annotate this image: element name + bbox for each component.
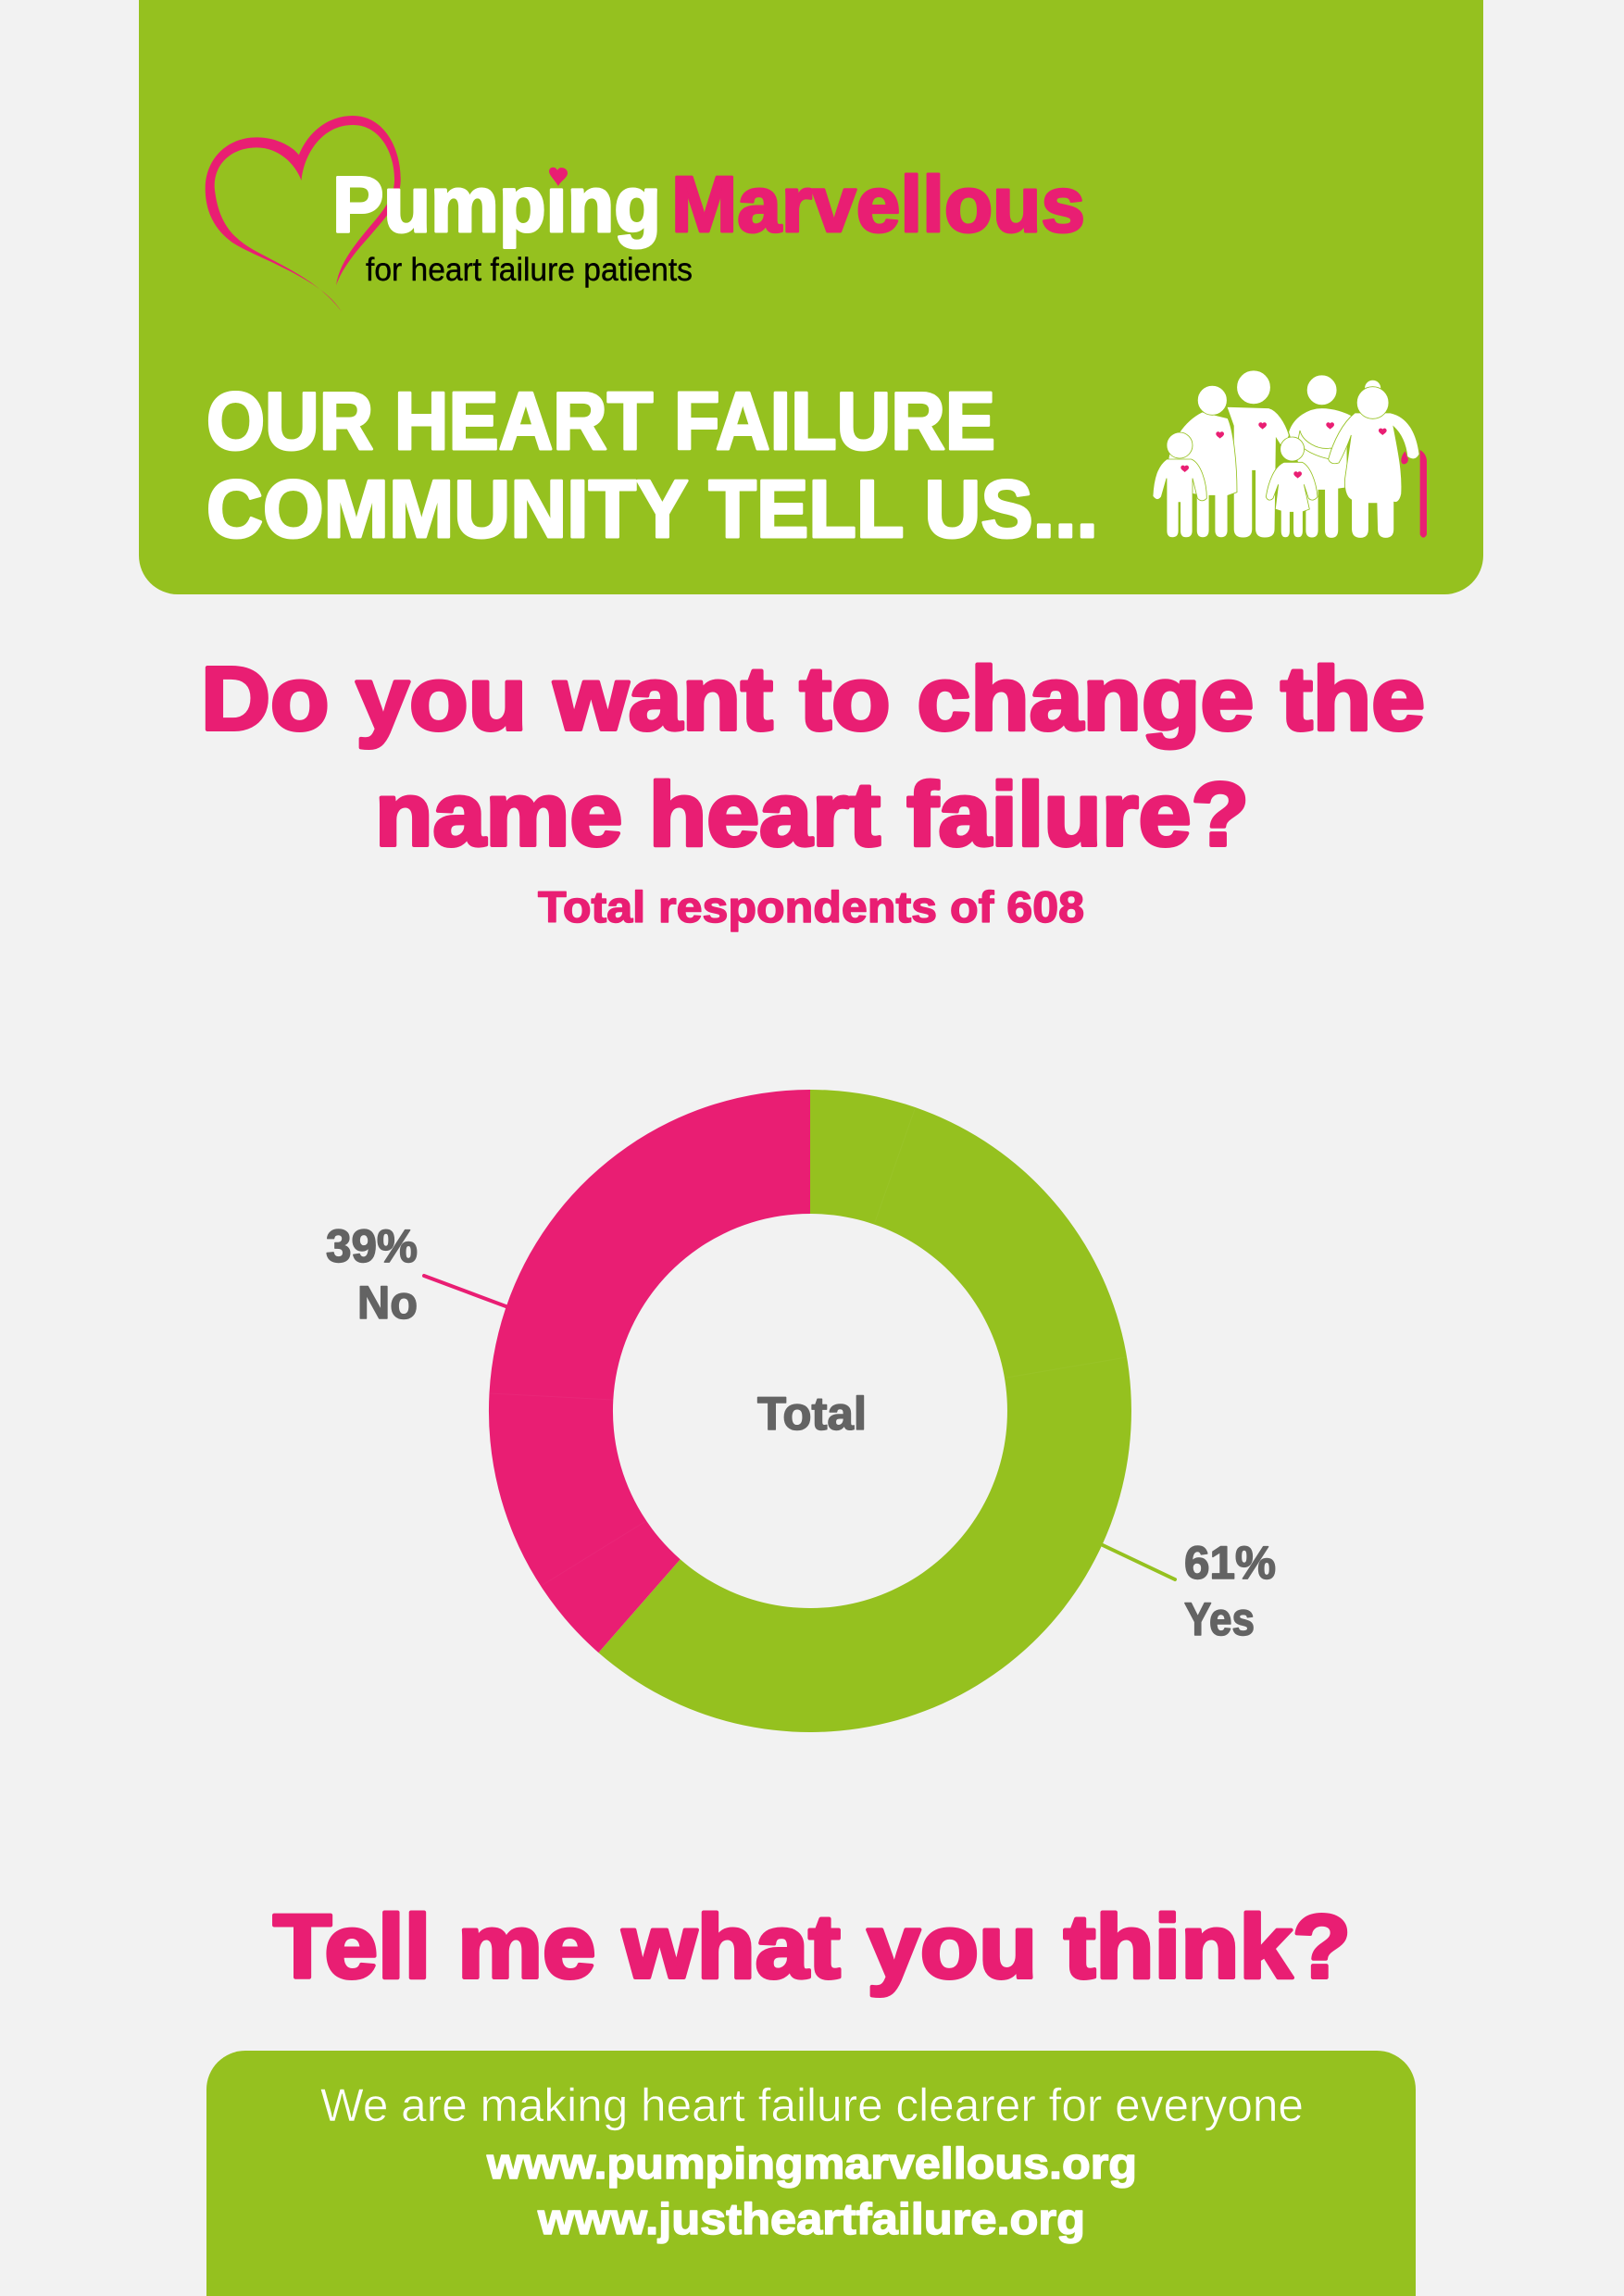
chart: donut of yes and no answers — [326, 1090, 1276, 1732]
subheading: respondents: Total respondents of 608 — [538, 882, 1084, 931]
footer links: www.pumpingmarvellous.org — [486, 2139, 1137, 2188]
heading: question: Do you want to change the — [201, 648, 1425, 749]
logo: Pumping Marvellous — [206, 116, 1085, 311]
icon: logo heart outline — [206, 116, 401, 311]
label: centre total: Total — [757, 1388, 867, 1440]
label: no — [326, 1220, 418, 1329]
footer links — [486, 2139, 1137, 2243]
label: yes: 61% — [1184, 1537, 1276, 1589]
figure: grandmother — [1329, 380, 1419, 538]
logo tagline: for heart failure patients — [366, 252, 693, 288]
figure: right adult — [1289, 375, 1354, 538]
leader line: yes — [1103, 1545, 1175, 1579]
footer tagline: We are making heart failure clearer for everyone — [320, 2079, 1304, 2131]
figure: arm of right adult — [1298, 430, 1333, 459]
leader line: no — [424, 1276, 508, 1307]
heading: question — [201, 648, 1425, 865]
heading: question: name heart failure? — [375, 764, 1249, 865]
label: yes: Yes — [1184, 1593, 1255, 1645]
panel: footer — [206, 2051, 1416, 2296]
heading: call to action: Tell me what you think? — [273, 1896, 1351, 1997]
header title: OUR HEART FAILURE — [206, 375, 995, 467]
figure: man — [1227, 370, 1289, 538]
label: no: 39% — [326, 1220, 418, 1272]
panel: header — [139, 0, 1483, 594]
label: no: No — [357, 1277, 418, 1329]
header title — [206, 375, 1098, 555]
segment: yes 61% — [598, 1090, 1131, 1732]
segment: no 39% — [489, 1090, 810, 1653]
footer links: www.justheartfailure.org — [537, 2194, 1085, 2243]
figure: girl — [1266, 437, 1318, 538]
icon: walking cane — [1401, 450, 1427, 538]
header title: COMMUNITY TELL US... — [206, 463, 1098, 555]
figure: left child — [1153, 432, 1206, 538]
figure: left adult — [1168, 385, 1237, 538]
patch hiding the dot of the i — [545, 163, 571, 186]
logo word: Pumping: Pumping — [332, 161, 661, 249]
icons: small hearts on chests — [1181, 422, 1387, 479]
logo word: Marvellous: Marvellous — [671, 161, 1085, 249]
icon: family group — [1153, 370, 1427, 538]
icon: small heart over the i — [549, 168, 568, 186]
label: yes — [1184, 1537, 1276, 1645]
